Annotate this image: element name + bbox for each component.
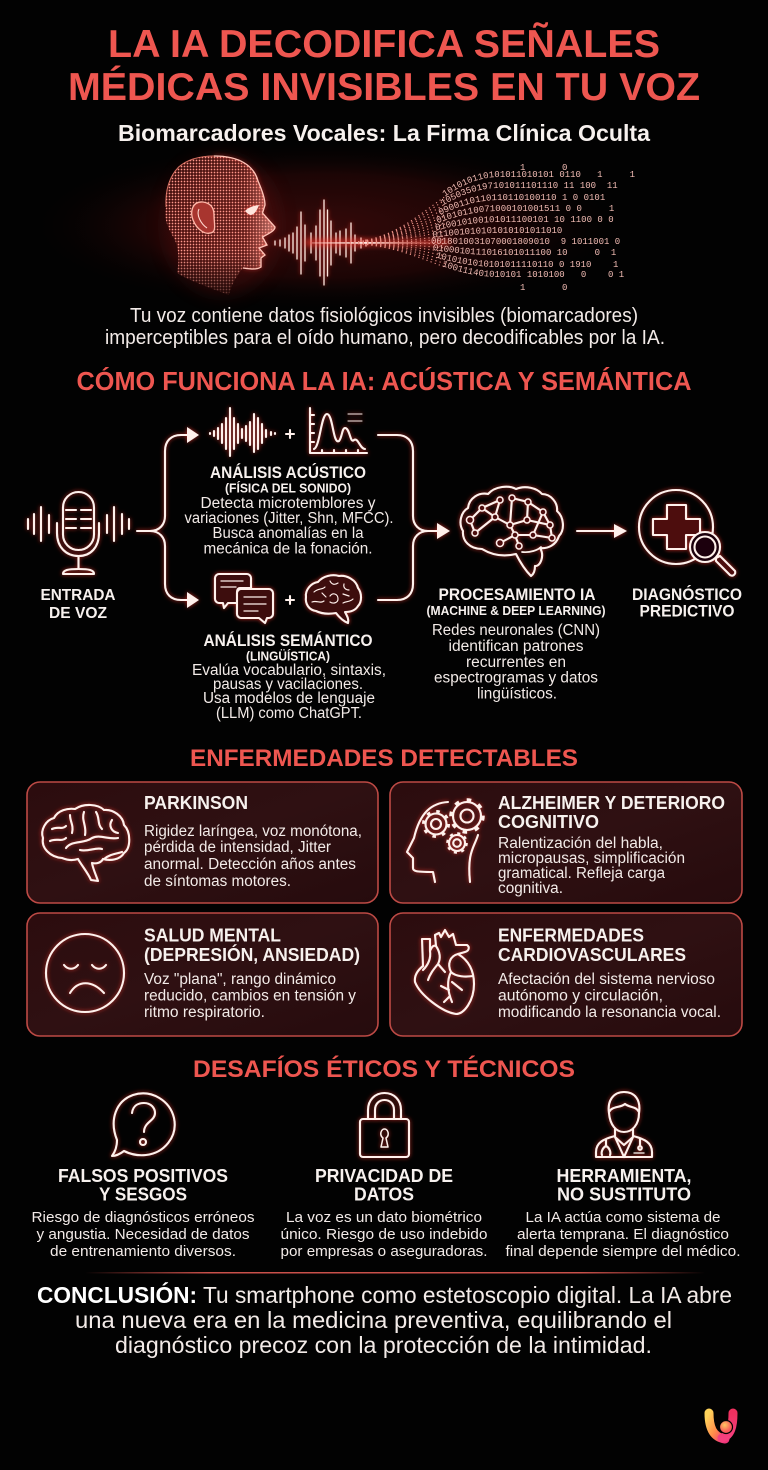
sound wave (275, 200, 366, 285)
panel: Parkinson (27, 782, 378, 903)
icon: head with gears (407, 800, 483, 882)
AI processing text: recurrentes en (466, 654, 566, 671)
AI processing text: Redes neuronales (CNN) (432, 622, 600, 639)
section heading: detectable diseases: ENFERMEDADES DETECTABLES (190, 745, 578, 772)
section heading: how it works: CÓMO FUNCIONA LA IA: ACÚSTICA Y SEMÁNTICA (76, 366, 692, 396)
cardiovascular text: CARDIOVASCULARES (498, 945, 686, 965)
hero illustration: head, sound wave and binary data (92, 150, 635, 300)
arrow: processing to diagnosis (577, 524, 627, 538)
panel: Alzheimer (390, 782, 742, 903)
icon: anatomical heart (415, 930, 474, 1014)
mental health text (144, 926, 360, 1021)
predictive diagnosis label: DIAGNÓSTICO (632, 585, 742, 604)
icon: padlock (360, 1093, 409, 1157)
cardiovascular text: modificando la resonancia vocal. (498, 1004, 721, 1021)
acoustic analysis text: (FÍSICA DEL SONIDO) (225, 480, 351, 496)
semantic analysis text: (LLM) como ChatGPT. (216, 705, 362, 722)
title: MÉDICAS INVISIBLES EN TU VOZ (68, 65, 700, 109)
logo (709, 1413, 733, 1439)
icon: spectrum chart (310, 408, 367, 453)
data privacy text: por empresas o aseguradoras. (280, 1243, 488, 1260)
Parkinson text (144, 793, 362, 890)
Alzheimer text: gramatical. Refleja carga (498, 865, 665, 882)
semantic analysis text: Evalúa vocabulario, sintaxis, (192, 662, 386, 679)
binary data stream: 0 (562, 163, 567, 173)
AI processing text: espectrogramas y datos (434, 670, 598, 686)
data privacy text: PRIVACIDAD DE (315, 1166, 453, 1186)
Alzheimer text: cognitiva. (498, 880, 563, 897)
challenge: tool, not substitute (506, 1092, 740, 1260)
title: LA IA DECODIFICA SEÑALES (108, 22, 660, 66)
icon: chat bubbles (215, 574, 273, 623)
predictive diagnosis label (632, 585, 742, 620)
data privacy text: único. Riesgo de uso indebido (280, 1226, 488, 1243)
semantic analysis text: Usa modelos de lenguaje (203, 690, 375, 707)
binary data stream: 0 (562, 283, 567, 293)
Alzheimer text (498, 793, 725, 897)
tool not substitute text: La IA actúa como sistema de (526, 1209, 720, 1226)
mental health text: reducido, cambios en tensión y (144, 988, 356, 1004)
data privacy text: DATOS (354, 1184, 414, 1204)
voice input label (40, 587, 116, 622)
data privacy text (280, 1166, 488, 1260)
icon: question bubble (112, 1093, 175, 1156)
plus sign (286, 430, 294, 438)
icon: mesh head profile (160, 150, 280, 300)
cardiovascular text: Afectación del sistema nervioso (498, 971, 715, 988)
Parkinson text: anormal. Detección años antes (144, 856, 356, 873)
Alzheimer text: micropausas, simplificación (498, 850, 685, 867)
AI processing text: PROCESAMIENTO IA (438, 586, 596, 604)
acoustic analysis text: Busca anomalías en la (212, 525, 364, 542)
icon: medical cross with magnifier (639, 490, 735, 576)
wave beam (305, 239, 450, 246)
tool not substitute text: NO SUSTITUTO (557, 1184, 691, 1204)
icon: semantic brain (306, 575, 361, 623)
AI processing text: (MACHINE & DEEP LEARNING) (426, 604, 606, 618)
mental health text: Voz "plana", rango dinámico (144, 971, 336, 988)
binary data stream: 100111401010101 1010100 0 0 1 (442, 261, 624, 277)
Parkinson text: PARKINSON (144, 793, 248, 813)
subtitle: Biomarcadores Vocales: La Firma Clínica Oculta (118, 120, 651, 146)
intro text (105, 305, 665, 349)
false positives text: Riesgo de diagnósticos erróneos (32, 1209, 254, 1226)
binary data stream: 0018010031070001809010 9 1011001 0 (432, 238, 620, 244)
data privacy text: La voz es un dato biométrico (286, 1209, 482, 1226)
mental health text: SALUD MENTAL (144, 926, 281, 946)
icon: microphone (28, 492, 129, 574)
panel: mental health (27, 913, 378, 1036)
intro text: Tu voz contiene datos fisiológicos invisibles (biomarcadores) (130, 305, 638, 327)
conclusion: una nueva era en la medicina preventiva, equilibrando el (75, 1307, 672, 1333)
arrow: analyses merging to AI processing (378, 435, 450, 600)
tool not substitute text: alerta temprana. El diagnóstico (517, 1226, 729, 1243)
cardiovascular text (498, 926, 721, 1021)
Parkinson text: de síntomas motores. (144, 873, 291, 890)
section heading: challenges: DESAFÍOS ÉTICOS Y TÉCNICOS (193, 1055, 575, 1083)
title (68, 22, 700, 109)
semantic analysis text: pausas y vacilaciones. (213, 676, 363, 693)
tool not substitute text (506, 1166, 740, 1260)
acoustic analysis text (184, 463, 394, 558)
Alzheimer text: COGNITIVO (498, 812, 599, 832)
icon: acoustic waveform (210, 408, 275, 456)
mental health text: ritmo respiratorio. (144, 1004, 265, 1021)
binary data stream: 01010110071000101001511 0 0 1 (436, 205, 614, 222)
icon: brain (42, 805, 129, 881)
icon: AI neural brain (461, 487, 563, 576)
converging data dots (345, 196, 445, 268)
challenge: data privacy (280, 1093, 488, 1260)
binary data stream: 1010101010101011110110 0 1910 1 (436, 252, 618, 267)
icon: doctor (596, 1092, 652, 1157)
acoustic analysis text: variaciones (Jitter, Shn, MFCC). (184, 510, 394, 527)
challenge: false positives (32, 1093, 254, 1260)
voice input label: DE VOZ (49, 605, 107, 622)
binary data stream (432, 163, 635, 293)
binary data stream: 101010110101011010101 0110 1 1 (442, 171, 635, 196)
conclusion: CONCLUSIÓN: Tu smartphone como estetoscopio digital. La IA abre (37, 1281, 732, 1308)
Alzheimer text: ALZHEIMER Y DETERIORO (498, 793, 725, 813)
cardiovascular text: ENFERMEDADES (498, 926, 644, 946)
AI processing text (426, 586, 606, 702)
Parkinson text: Rigidez laríngea, voz monótona, (144, 823, 362, 840)
arrow: input branching to analyses (137, 427, 199, 608)
binary data stream: 1050350197101011101110 11 100 11 (440, 182, 618, 206)
false positives text: Y SESGOS (99, 1184, 187, 1204)
plus sign (286, 596, 294, 604)
binary data stream: 1 (520, 283, 525, 293)
binary data stream: 1 (520, 163, 525, 173)
Parkinson text: pérdida de intensidad, Jitter (144, 839, 331, 856)
flow diagram (28, 408, 742, 722)
icon: sad face (46, 934, 124, 1012)
cardiovascular text: autónomo y circulación, (498, 988, 663, 1004)
semantic analysis text (192, 631, 386, 722)
tool not substitute text: final depende siempre del médico. (506, 1243, 740, 1260)
binary data stream: 010010100101011100101 10 1100 0 0 (436, 216, 614, 230)
conclusion (37, 1281, 732, 1358)
acoustic analysis text: Detecta microtemblores y (200, 495, 376, 512)
AI processing text: lingüísticos. (477, 686, 557, 702)
intro text: imperceptibles para el oído humano, pero decodificables por la IA. (105, 327, 665, 349)
binary data stream: 0100010111016101011100 10 0 1 (434, 244, 616, 255)
false positives text: y angustia. Necesidad de datos (36, 1226, 250, 1243)
binary data stream: 011001010101010101011010 (432, 227, 562, 238)
tool not substitute text: HERRAMIENTA, (556, 1166, 692, 1186)
Alzheimer text: Ralentización del habla, (498, 835, 663, 852)
semantic analysis text: (LINGÜÍSTICA) (246, 648, 330, 664)
voice input label: ENTRADA (40, 587, 116, 604)
acoustic analysis text: mecánica de la fonación. (204, 540, 372, 558)
binary data stream: 0900110110110110100110 1 0 0101 (438, 194, 605, 214)
semantic analysis text: ANÁLISIS SEMÁNTICO (204, 631, 373, 650)
false positives text: FALSOS POSITIVOS (58, 1166, 228, 1186)
mental health text: (DEPRESIÓN, ANSIEDAD) (144, 944, 360, 965)
acoustic analysis text: ANÁLISIS ACÚSTICO (210, 463, 366, 482)
false positives text: de entrenamiento diversos. (50, 1243, 236, 1260)
false positives text (32, 1166, 254, 1260)
panel: cardiovascular (390, 913, 742, 1036)
predictive diagnosis label: PREDICTIVO (640, 602, 735, 620)
AI processing text: identifican patrones (448, 638, 584, 655)
conclusion: diagnóstico precoz con la protección de la intimidad. (115, 1332, 652, 1358)
